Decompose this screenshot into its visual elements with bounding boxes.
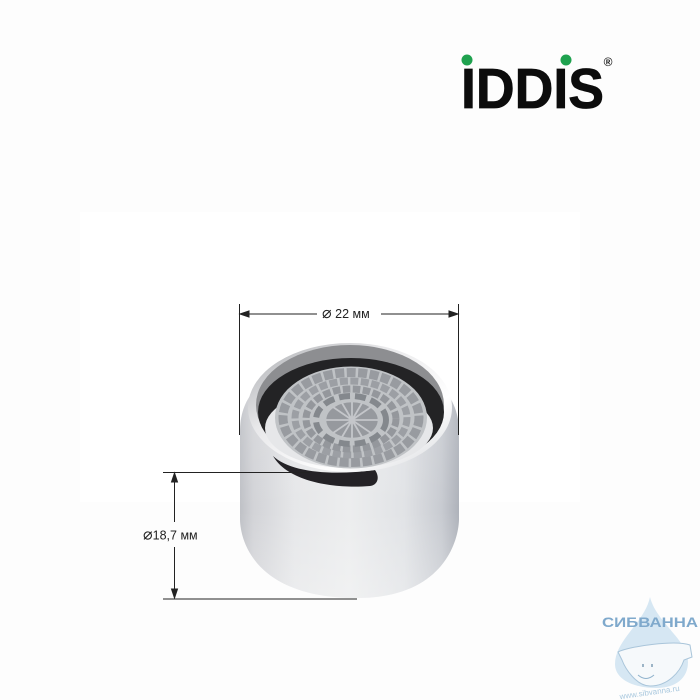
dimension arrow right: [381, 311, 458, 317]
dimension: 22 mm: [240, 304, 458, 435]
logo green dot left: [462, 54, 472, 66]
dimension arrow bottom: [172, 547, 178, 598]
bottom extension line: [163, 598, 357, 600]
mesh centre star: [326, 402, 378, 438]
watermark drop: [615, 597, 688, 688]
background panel: [80, 212, 580, 502]
dimension arrow top: [172, 473, 178, 522]
inner cavity grey: [256, 345, 444, 465]
chrome rim: [248, 343, 452, 472]
logo wordmark: IDDIS: [461, 57, 604, 121]
label 22 mm: ⌀ 22 мм: [322, 305, 370, 322]
label 18.7 mm: ⌀18,7 мм: [143, 526, 198, 544]
watermark eyes: [643, 664, 652, 667]
mesh cells band 2: [295, 381, 407, 455]
mesh cells band 1: [283, 372, 419, 462]
mesh base: [275, 366, 427, 468]
watermark: Sibvanna: [602, 597, 698, 700]
watermark smile: [638, 675, 654, 678]
mesh cells band 3: [306, 389, 396, 449]
extension lines: [240, 304, 458, 435]
dimension arrow left: [240, 311, 317, 317]
body shading: [240, 380, 459, 598]
logo green dot right: [560, 54, 572, 66]
watermark tub: [618, 643, 692, 686]
aerator product: [240, 343, 459, 598]
rim reflection dark: [273, 456, 378, 487]
inner cavity dark: [258, 358, 444, 466]
white mesh housing: [265, 388, 433, 468]
mesh cells band 4: [316, 396, 386, 444]
chrome body: [240, 380, 459, 598]
top extension line: [163, 472, 310, 474]
watermark name: СИБВАННА: [602, 614, 698, 630]
registered mark: ®: [604, 55, 613, 69]
mesh centre disc: [325, 401, 379, 439]
logo: IDDIS: [461, 54, 613, 121]
dimension: 18.7 mm: [143, 472, 357, 599]
